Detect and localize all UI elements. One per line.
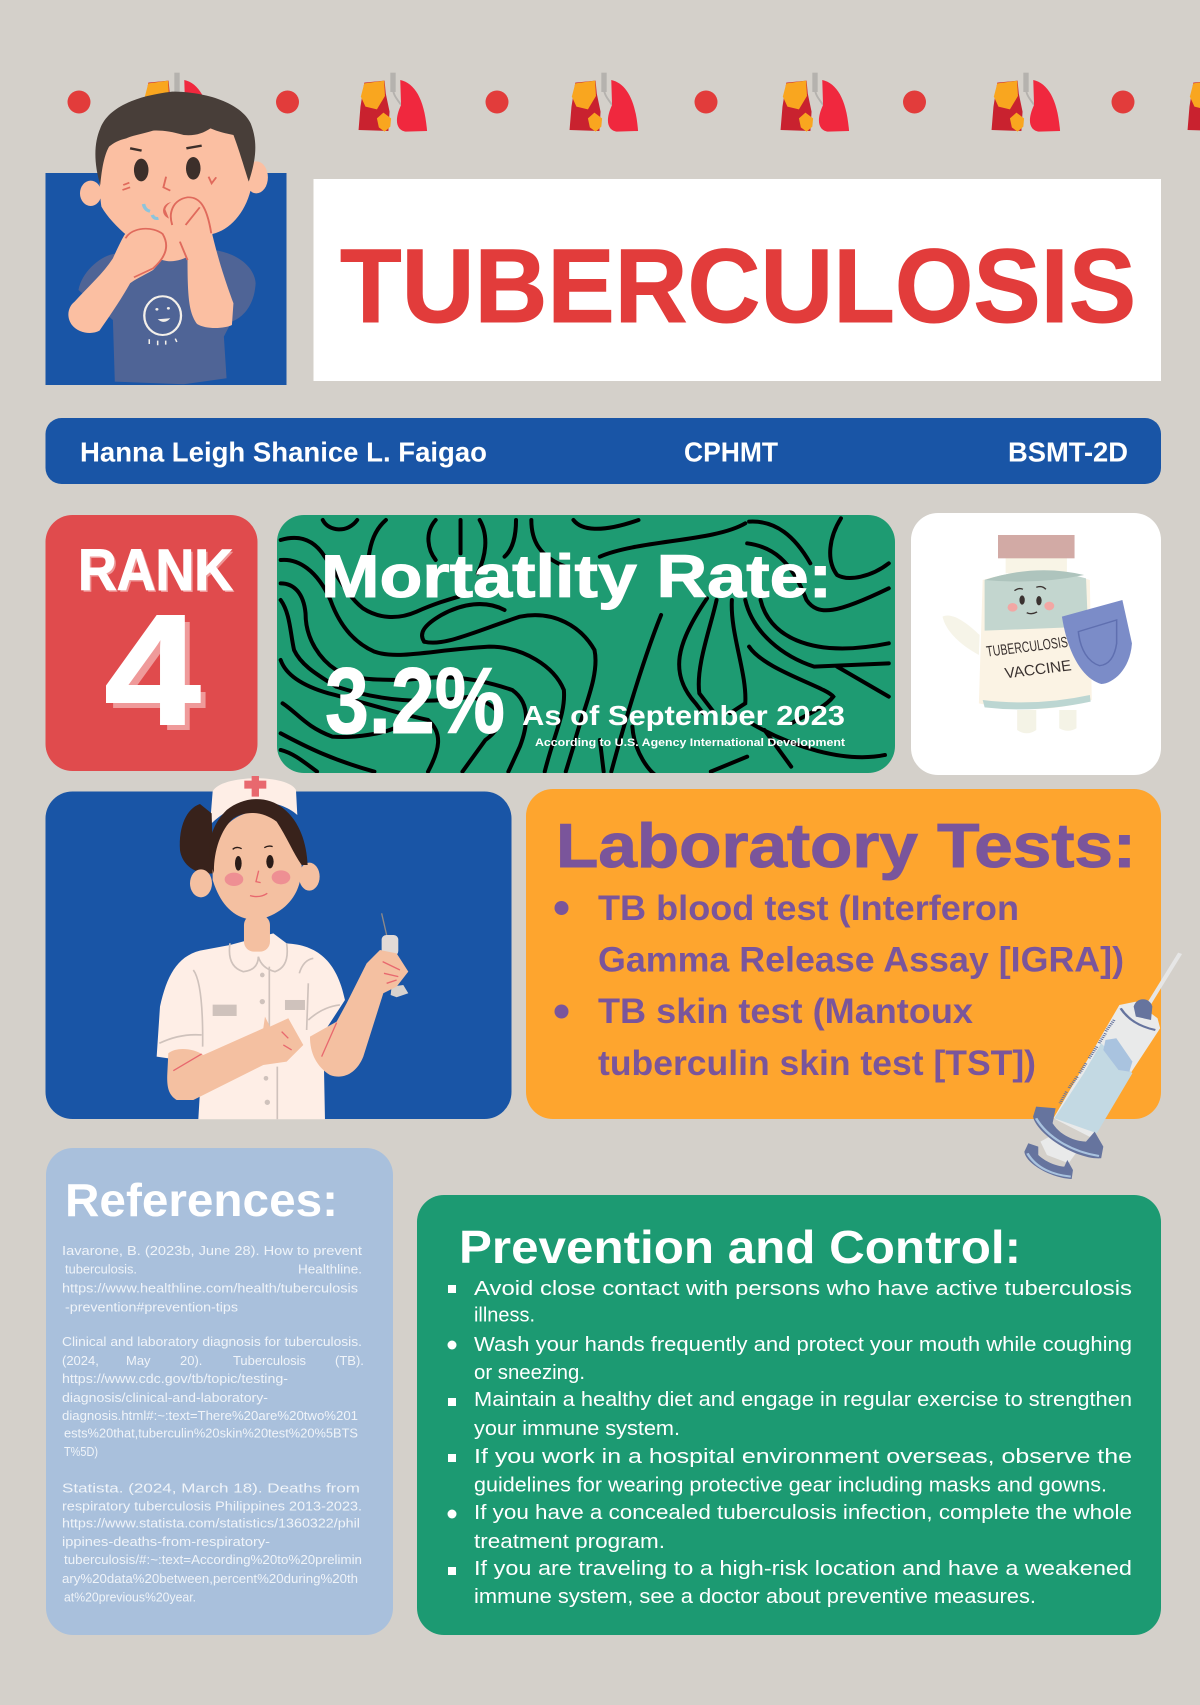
author bar <box>46 418 1161 484</box>
panel: rank: RANK <box>80 540 235 605</box>
panel: mortality rate: According to U.S. Agency International Development <box>535 737 845 749</box>
contour pattern <box>281 518 889 777</box>
prevention list: guidelines for wearing protective gear including masks and gowns. <box>474 1474 1107 1496</box>
illustration: nurse <box>157 776 408 1119</box>
prevention list: illness. <box>474 1304 535 1326</box>
panel: rank <box>46 515 258 771</box>
reference 1: Healthline. <box>298 1262 362 1276</box>
bullet list <box>554 889 1124 1083</box>
author bar: Hanna Leigh Shanice L. Faigao <box>80 436 487 468</box>
heading: Mortatlity Rate: <box>321 543 832 610</box>
stat value: 3.2% <box>325 648 505 753</box>
icon row: lungs <box>143 73 1200 132</box>
prevention list: treatment program. <box>474 1531 665 1553</box>
reference 1: https://www.healthline.com/health/tuberculosis <box>62 1280 359 1296</box>
prevention list: Wash your hands frequently and protect your mouth while coughing <box>474 1334 1132 1356</box>
bullet list: TB skin test (Mantoux <box>598 992 974 1031</box>
panel: mortality rate <box>277 515 895 777</box>
prevention list: If you have a concealed tuberculosis infection, complete the whole <box>474 1502 1132 1524</box>
icon: syringe <box>1024 953 1180 1179</box>
prevention list: Maintain a healthy diet and engage in regular exercise to strengthen <box>474 1389 1132 1411</box>
reference 2: (2024, <box>62 1353 99 1368</box>
reference 3: https://www.statista.com/statistics/1360322/phil <box>62 1516 360 1530</box>
reference 1 <box>62 1243 362 1314</box>
prevention list: Avoid close contact with persons who have active tuberculosis <box>474 1278 1132 1300</box>
heading: Prevention and Control: <box>459 1221 1021 1273</box>
bullet list: Gamma Release Assay [IGRA]) <box>598 940 1124 980</box>
author bar: CPHMT <box>684 436 778 468</box>
reference 3: ippines-deaths-from-respiratory- <box>62 1534 270 1549</box>
panel: prevention and control <box>417 1195 1161 1635</box>
bullet markers <box>448 1285 456 1575</box>
author bar: BSMT-2D <box>1008 436 1128 468</box>
reference 3 <box>62 1480 362 1604</box>
reference 3: at%20previous%20year. <box>64 1590 196 1604</box>
prevention list: If you are traveling to a high-risk location and have a weakened <box>474 1558 1132 1580</box>
blue square behind boy <box>46 173 286 385</box>
reference 3: tuberculosis/#:~:text=According%20to%20prelimin <box>64 1552 362 1567</box>
prevention list: your immune system. <box>474 1418 680 1440</box>
vaccine label: TUBERCULOSIS <box>985 634 1069 661</box>
panel: rank: 4 <box>110 589 206 764</box>
reference 2: diagnosis.html#:~:text=There%20are%20two%201 <box>62 1408 358 1423</box>
reference 2: 20). <box>180 1353 202 1368</box>
reference 2: ests%20that,tuberculin%20skin%20test%20%5BTS <box>64 1426 358 1440</box>
panel: references <box>46 1148 393 1635</box>
reference 2: https://www.cdc.gov/tb/topic/testing- <box>62 1371 288 1386</box>
reference 1: Iavarone, B. (2023b, June 28). How to prevent <box>62 1243 362 1258</box>
prevention list: immune system, see a doctor about preventive measures. <box>474 1586 1036 1608</box>
title: TUBERCULOSIS <box>340 228 1136 345</box>
panel: vaccine illustration <box>911 513 1161 775</box>
decorative top row: red dots <box>68 90 1134 114</box>
title panel <box>314 179 1161 381</box>
icon: vaccine bottle <box>943 535 1132 733</box>
reference 2 <box>62 1334 364 1459</box>
bullet list: tuberculin skin test [TST]) <box>598 1044 1036 1083</box>
reference 2: May <box>126 1353 151 1368</box>
panel: mortality rate: As of September 2023 <box>522 700 845 731</box>
reference 3: Statista. (2024, March 18). Deaths from <box>62 1480 360 1496</box>
illustration: coughing boy <box>68 92 268 384</box>
reference 2: Clinical and laboratory diagnosis for tuberculosis. <box>62 1334 362 1349</box>
panel: rank: 4 <box>104 583 200 758</box>
reference 1: -prevention#prevention-tips <box>65 1300 239 1314</box>
reference 3: ary%20data%20between,percent%20during%20th <box>62 1571 358 1586</box>
prevention list: If you work in a hospital environment overseas, observe the <box>474 1446 1132 1468</box>
reference 3: respiratory tuberculosis Philippines 2013-2023. <box>62 1498 362 1514</box>
icon: vaccine bottle: VACCINE <box>1004 657 1073 682</box>
reference 2: diagnosis/clinical-and-laboratory- <box>62 1390 268 1405</box>
reference 2: (TB). <box>335 1353 364 1368</box>
prevention list: or sneezing. <box>474 1362 585 1384</box>
reference 2: Tuberculosis <box>233 1353 306 1368</box>
bullet list: TB blood test (Interferon <box>598 889 1019 928</box>
reference 1: tuberculosis. <box>65 1262 137 1276</box>
prevention list <box>474 1278 1132 1608</box>
heading: Laboratory Tests: <box>556 812 1136 881</box>
reference 2: T%5D) <box>64 1444 98 1459</box>
panel: rank: RANK <box>78 538 233 603</box>
heading: References: <box>65 1174 338 1226</box>
panel: nurse <box>46 792 512 1119</box>
panel: laboratory tests <box>526 789 1161 1119</box>
